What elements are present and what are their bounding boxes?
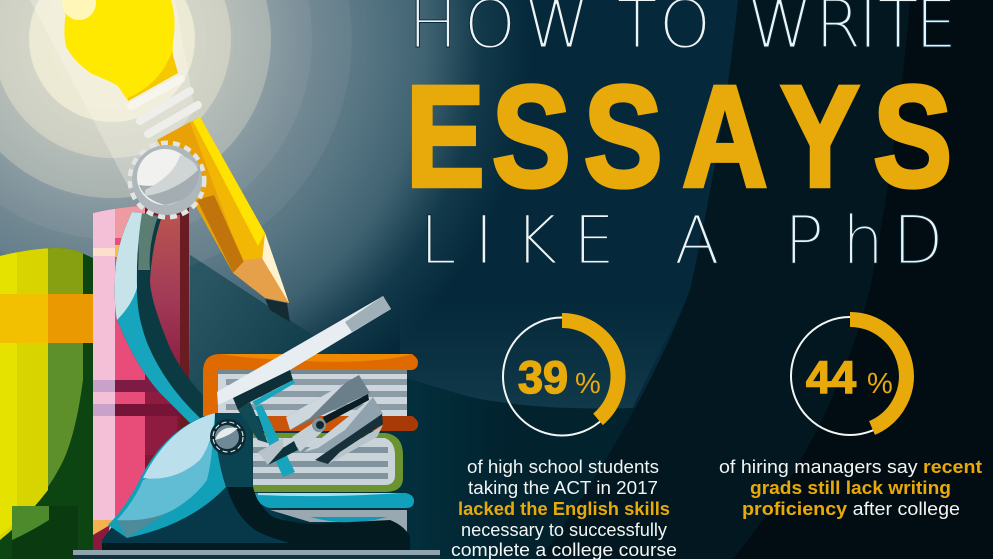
- green book: [253, 433, 403, 492]
- icon: pencil: [157, 117, 290, 322]
- microscope base: [102, 430, 410, 550]
- value: 39 percent: 39: [518, 352, 568, 403]
- light glow rings: [0, 0, 352, 279]
- microscope lens body: [108, 413, 226, 538]
- description: 39 percent: necessary to successfully: [461, 520, 667, 540]
- blue book: [255, 493, 414, 508]
- stack of books: [203, 354, 418, 532]
- icon: light bulb: [62, 0, 198, 134]
- icon: gear: [130, 143, 204, 217]
- stat: 39 percent: [451, 318, 677, 559]
- microscope stand: [102, 413, 410, 550]
- donut chart: 39 percent: [503, 318, 621, 436]
- title line: like a phd: LIKE A PhD: [420, 202, 943, 279]
- book: green: [0, 240, 93, 559]
- title: [406, 0, 957, 279]
- book: pink: [93, 200, 189, 559]
- description: 39 percent: of high school students: [467, 457, 659, 477]
- description: 44 percent: of hiring managers say recent: [719, 457, 982, 477]
- microscope arm: [115, 212, 222, 423]
- description: 39 percent: taking the ACT in 2017: [468, 478, 658, 498]
- description: 44 percent: [719, 457, 982, 519]
- microscope knob: [210, 419, 246, 455]
- shelf: [73, 550, 440, 559]
- value: 39 percent: %: [575, 368, 601, 400]
- title line: essays: ESSAYS: [406, 56, 952, 217]
- description: 39 percent: lacked the English skills: [458, 499, 670, 519]
- value: 44 percent: 44: [806, 352, 856, 403]
- top orange book: [203, 354, 418, 416]
- description: 44 percent: grads still lack writing: [750, 478, 951, 498]
- microscope tube: [217, 296, 391, 477]
- donut chart: 44 percent: [791, 317, 909, 435]
- icon: pencil sharpener: [286, 375, 383, 464]
- stat: 44 percent: [719, 317, 982, 519]
- value: 44 percent: %: [867, 368, 893, 400]
- description: 39 percent: [451, 457, 677, 559]
- description: 44 percent: proficiency after college: [742, 499, 960, 519]
